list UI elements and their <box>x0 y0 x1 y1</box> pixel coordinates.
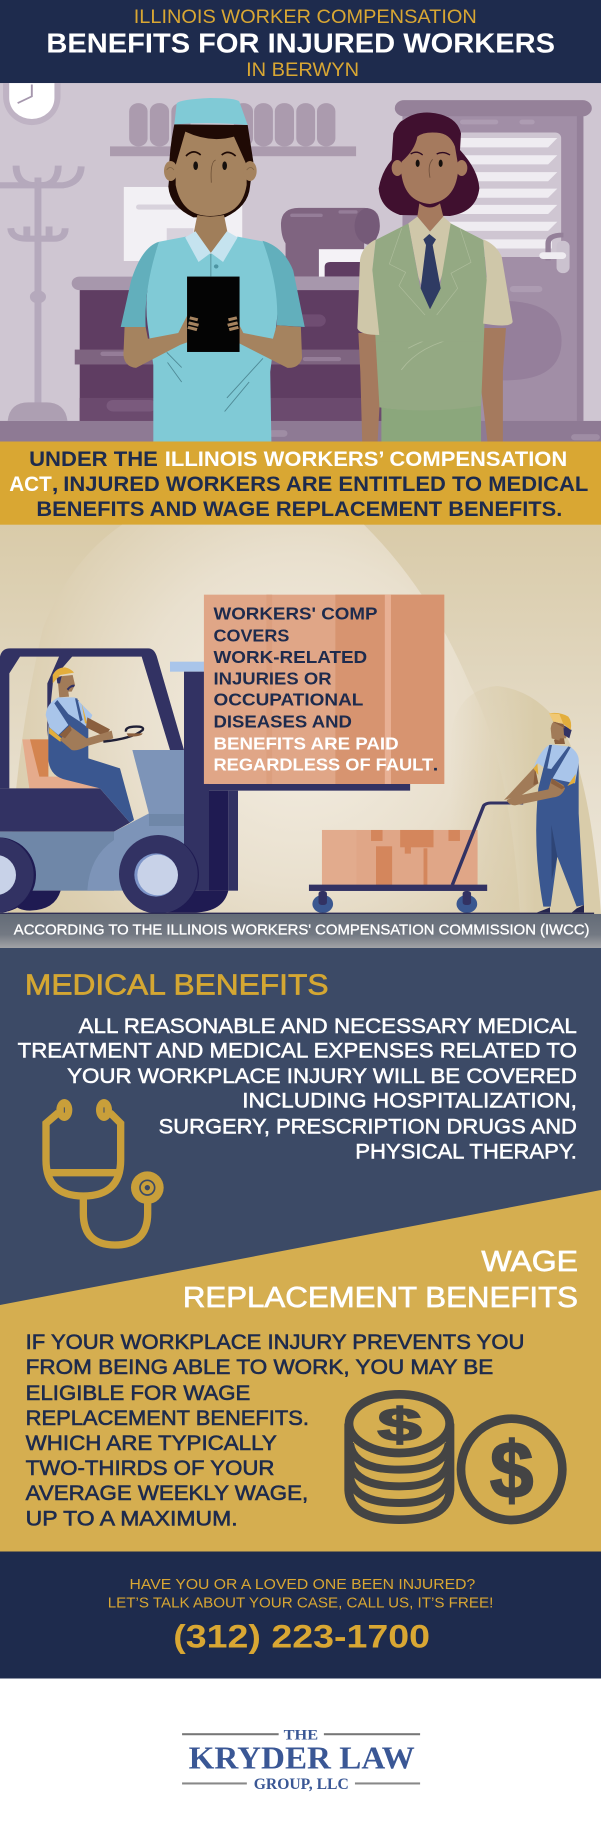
body text: wage replacement: FROM BEING ABLE TO WORK, YOU MAY BE <box>26 1355 493 1379</box>
header line: Illinois Worker Compensation: ILLINOIS WORKER COMPENSATION <box>134 6 477 28</box>
cargo box with text: DISEASES AND <box>213 712 352 731</box>
body text: wage replacement: WHICH ARE TYPICALLY <box>26 1431 277 1455</box>
body text: medical benefits: INCLUDING HOSPITALIZATION, <box>242 1088 577 1112</box>
floor <box>0 421 601 442</box>
body text: wage replacement: UP TO A MAXIMUM. <box>26 1507 238 1530</box>
gold statement band <box>0 442 601 525</box>
phone number: (312) 223-1700 <box>173 1618 430 1655</box>
body text: wage replacement: IF YOUR WORKPLACE INJURY PREVENTS YOU <box>26 1330 524 1354</box>
cargo box with text: OCCUPATIONAL <box>213 690 363 709</box>
icon: wall clock <box>3 83 61 125</box>
cargo box with text: . <box>433 755 438 774</box>
shelf with books <box>110 103 356 156</box>
worker pushing cart <box>504 713 584 913</box>
illustration: office background <box>0 83 601 442</box>
logo: The Kryder Law Group <box>182 1727 420 1793</box>
figure: nurse holding tablet <box>121 98 305 442</box>
logo: The Kryder Law Group: KRYDER LAW <box>189 1741 415 1776</box>
body text: wage replacement: ELIGIBLE FOR WAGE <box>26 1381 250 1405</box>
icon: coin stack and dollar coin <box>349 1394 562 1520</box>
scene foreground: cargo and hand cart <box>204 595 523 913</box>
body text: medical benefits: PHYSICAL THERAPY. <box>355 1139 577 1163</box>
gold statement band: ILLINOIS WORKERS’ COMPENSATION <box>165 447 567 471</box>
title: Benefits for Injured Workers: BENEFITS FOR INJURED WORKERS <box>46 28 555 59</box>
icon: coin stack and dollar coin: $ <box>490 1426 533 1515</box>
heading: wage replacement benefits <box>183 1245 578 1313</box>
call to action text: LET’S TALK ABOUT YOUR CASE, CALL US, IT’S FREE! <box>108 1595 493 1611</box>
warehouse background <box>0 525 601 914</box>
panel: wage replacement benefits <box>0 1190 601 1552</box>
header line: In Berwyn: IN BERWYN <box>246 59 359 81</box>
forklift driver <box>46 667 143 823</box>
body text: wage replacement: AVERAGE WEEKLY WAGE, <box>26 1481 308 1505</box>
logo: The Kryder Law Group: GROUP, LLC <box>254 1775 349 1793</box>
cargo box with text <box>204 595 444 784</box>
body text: wage replacement <box>26 1330 524 1530</box>
cargo box with text: REGARDLESS OF FAULT <box>213 755 434 774</box>
body text: medical benefits <box>18 1014 577 1163</box>
cargo box with text: INJURIES OR <box>213 669 332 688</box>
door with window blinds <box>395 100 592 423</box>
coat rack <box>0 166 81 421</box>
cargo box with text: BENEFITS ARE PAID <box>213 734 399 753</box>
source band: according to IWCC <box>0 913 601 948</box>
heading: wage replacement benefits: WAGE <box>481 1245 578 1277</box>
call to action footer <box>0 1552 601 1678</box>
desk with monitor and equipment <box>72 187 386 422</box>
icon: stethoscope <box>46 1099 164 1245</box>
cargo box with text: WORKERS' COMP <box>213 604 378 623</box>
forklift <box>0 648 238 914</box>
logo: The Kryder Law Group: THE <box>284 1727 318 1743</box>
gold statement band: ACT <box>9 471 52 496</box>
figure: woman in green vest and tie <box>357 113 513 442</box>
call to action text <box>108 1577 493 1611</box>
gold statement band: BENEFITS AND WAGE REPLACEMENT BENEFITS. <box>36 496 562 521</box>
hand cart with boxes <box>309 803 523 913</box>
gold statement band: , <box>52 471 58 496</box>
heading: medical benefits: MEDICAL BENEFITS <box>25 968 328 1001</box>
cargo box with text: WORK-RELATED <box>213 647 367 667</box>
call to action text: HAVE YOU OR A LOVED ONE BEEN INJURED? <box>130 1577 475 1593</box>
body text: wage replacement: TWO-THIRDS OF YOUR <box>26 1456 274 1480</box>
cargo box with text: COVERS <box>213 626 289 645</box>
body text: wage replacement: REPLACEMENT BENEFITS. <box>26 1406 309 1430</box>
header banner <box>0 0 601 83</box>
panel: medical benefits <box>0 948 601 1308</box>
gold statement band: UNDER THE <box>29 447 158 471</box>
icon: coin stack and dollar coin: $ <box>378 1399 422 1451</box>
heading: wage replacement benefits: REPLACEMENT BENEFITS <box>183 1281 578 1313</box>
